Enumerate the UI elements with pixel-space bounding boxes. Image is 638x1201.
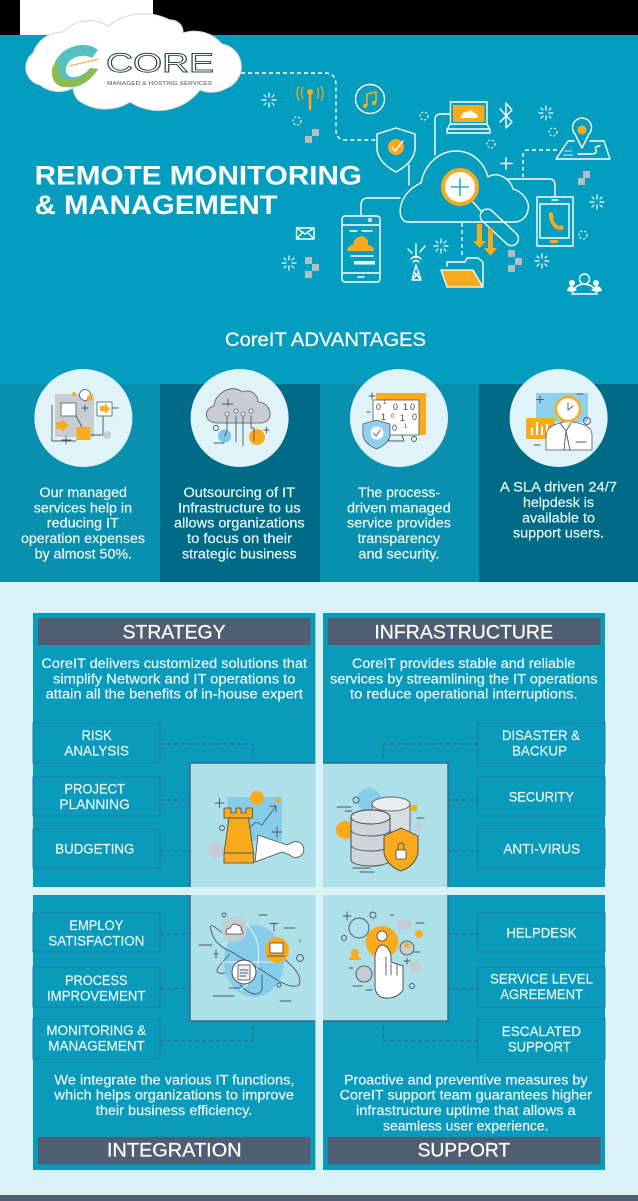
text: service provides (347, 516, 451, 531)
description: which helps organizations to improve (53, 1088, 294, 1103)
text (21, 485, 145, 561)
description: CoreIT provides stable and reliable (352, 656, 575, 671)
icon: database security (336, 788, 424, 872)
logo cloud (26, 14, 241, 111)
description: attain all the benefits of in-house expert (46, 687, 303, 702)
item: project planning: PLANNING (59, 797, 130, 812)
logo wordmark: CORE (106, 48, 214, 78)
item: disaster and backup (478, 723, 605, 763)
item: escalated support (478, 1019, 605, 1059)
description (340, 1072, 593, 1133)
icon: laptop (447, 102, 490, 133)
text: The process- (358, 485, 440, 500)
binary digits: 1 (400, 413, 405, 423)
logo tagline: MANAGED & HOSTING SERVICES (107, 81, 212, 87)
description: seamless user experience. (383, 1118, 548, 1133)
description: We integrate the various IT functions, (54, 1072, 294, 1087)
item: process improvement (33, 967, 160, 1007)
description: simplify Network and IT operations to (53, 671, 296, 686)
heading: INTEGRATION (107, 1141, 242, 1162)
item: risk analysis (33, 723, 160, 763)
text: Infrastructure to us (178, 500, 301, 515)
item: budgeting: BUDGETING (55, 841, 134, 856)
heading (328, 618, 600, 645)
icon: chess strategy (208, 791, 304, 863)
icon: bluetooth (500, 103, 512, 128)
text: operation expenses (21, 531, 145, 546)
heading: advantages: CoreIT ADVANTAGES (225, 330, 426, 351)
icon: map pin (556, 118, 610, 159)
icon: secure monitor (363, 393, 426, 449)
item: anti-virus: ANTI-VIRUS (503, 841, 580, 856)
text: driven managed (347, 500, 451, 515)
heading (38, 1137, 310, 1164)
central light square (190, 763, 448, 1021)
description: Proactive and preventive measures by (344, 1072, 588, 1087)
dashed connectors (160, 744, 478, 1041)
text: reducing IT (47, 516, 119, 531)
item: employ satisfaction (33, 913, 160, 952)
description (330, 656, 598, 702)
item: service level agreement: AGREEMENT (500, 987, 583, 1002)
text (500, 480, 617, 541)
item: monitoring and management: MONITORING & (46, 1023, 146, 1038)
hero panel background (0, 35, 638, 384)
heading: INFRASTRUCTURE (374, 622, 553, 643)
description: infrastructure uptime that allows a (356, 1103, 576, 1118)
description: to reduce operational interruptions. (350, 687, 578, 702)
description: CoreIT support team guarantees higher (340, 1088, 593, 1103)
binary digits: 1 (404, 424, 408, 430)
title: & MANAGEMENT (35, 190, 278, 220)
binary digits: 0 (391, 414, 395, 420)
item: security: SECURITY (509, 789, 574, 804)
icon: shield (377, 128, 415, 172)
text: strategic business (182, 546, 297, 561)
logo swirl icon (52, 45, 99, 87)
title (35, 160, 362, 220)
hero network illustration (241, 73, 610, 294)
description (53, 1072, 294, 1118)
binary digits: 1 (403, 402, 408, 412)
item: process improvement: IMPROVEMENT (47, 988, 146, 1003)
heading: SUPPORT (418, 1141, 511, 1162)
icon: workflow (52, 390, 118, 444)
icon: integration globe (199, 913, 304, 1001)
text: available to (522, 510, 595, 525)
icon: search cloud (400, 151, 528, 248)
item: monitoring and management: MANAGEMENT (48, 1038, 145, 1053)
panel: infrastructure (323, 613, 605, 887)
icon: users (567, 274, 602, 294)
item: escalated support: SUPPORT (508, 1039, 571, 1054)
text: services help in (34, 500, 132, 515)
panel: advantage 1 (0, 369, 160, 582)
item: risk analysis: ANALYSIS (64, 743, 129, 758)
sparkles and pixels (262, 93, 604, 278)
panel: support (323, 895, 605, 1170)
text: to focus on their (187, 531, 293, 546)
item: project planning (33, 777, 160, 816)
icon: cloud circuit (206, 389, 270, 446)
binary digits: 1 (381, 412, 386, 422)
description: CoreIT delivers customized solutions that (41, 656, 307, 671)
icon: support touch (342, 912, 424, 998)
binary digits: 0 (393, 402, 398, 412)
text (174, 485, 305, 561)
icon: support executive (526, 393, 592, 450)
icon: folder (441, 258, 483, 287)
text: by almost 50%. (35, 546, 132, 561)
item: helpdesk: HELPDESK (506, 926, 576, 941)
heading: STRATEGY (123, 622, 226, 643)
item: escalated support: ESCALATED (502, 1024, 581, 1039)
heading (328, 1137, 600, 1164)
binary digits: 0 (376, 402, 381, 412)
dashed connector from logo to shield (241, 73, 377, 140)
icon: phone left (342, 216, 380, 282)
item: budgeting (33, 829, 160, 868)
description: services by streamlining the IT operations (330, 671, 598, 686)
binary digits: 0 (410, 402, 415, 412)
item: helpdesk (478, 913, 605, 952)
item: service level agreement: SERVICE LEVEL (490, 972, 593, 987)
top black band (0, 0, 638, 35)
icon: radio tower (408, 244, 425, 280)
item: security (478, 777, 605, 816)
heading (38, 618, 310, 645)
panel: advantage 2 (160, 369, 320, 582)
item: disaster and backup: DISASTER & (502, 728, 580, 743)
text: Our managed (40, 485, 127, 500)
binary digits: 0 (392, 423, 397, 433)
item: project planning: PROJECT (64, 782, 125, 797)
panel: integration (33, 895, 315, 1170)
icon: music note (356, 84, 384, 114)
footer bar (0, 1195, 638, 1201)
item: employ satisfaction: EMPLOY (69, 918, 123, 933)
icon: phone right (537, 197, 573, 246)
icon: download arrows (473, 224, 497, 256)
item: anti-virus (478, 829, 605, 868)
item: process improvement: PROCESS (65, 973, 128, 988)
icon: signal antenna (297, 86, 323, 109)
text: transparency (358, 531, 440, 546)
panel: advantage 3 (320, 369, 479, 582)
icon: envelope (296, 228, 314, 239)
text: helpdesk is (523, 495, 594, 510)
text: A SLA driven 24/7 (500, 480, 617, 495)
item: employ satisfaction: SATISFACTION (48, 933, 144, 948)
title: REMOTE MONITORING (35, 160, 362, 190)
text: and security. (358, 546, 439, 561)
text (347, 485, 451, 561)
connector lines (361, 114, 555, 216)
text: Outsourcing of IT (184, 485, 295, 500)
item: risk analysis: RISK (82, 728, 112, 743)
item: service level agreement (478, 967, 605, 1007)
text: support users. (513, 526, 604, 541)
text: allows organizations (174, 516, 305, 531)
panel: advantage 4 (479, 369, 638, 582)
item: monitoring and management (33, 1019, 160, 1059)
panel: strategy (33, 613, 315, 887)
binary digits: 1 (383, 400, 387, 406)
description: their business efficiency. (96, 1103, 252, 1118)
binary digits (376, 400, 417, 433)
item: disaster and backup: BACKUP (512, 743, 567, 758)
binary digits: 0 (412, 412, 417, 422)
description (41, 656, 307, 702)
